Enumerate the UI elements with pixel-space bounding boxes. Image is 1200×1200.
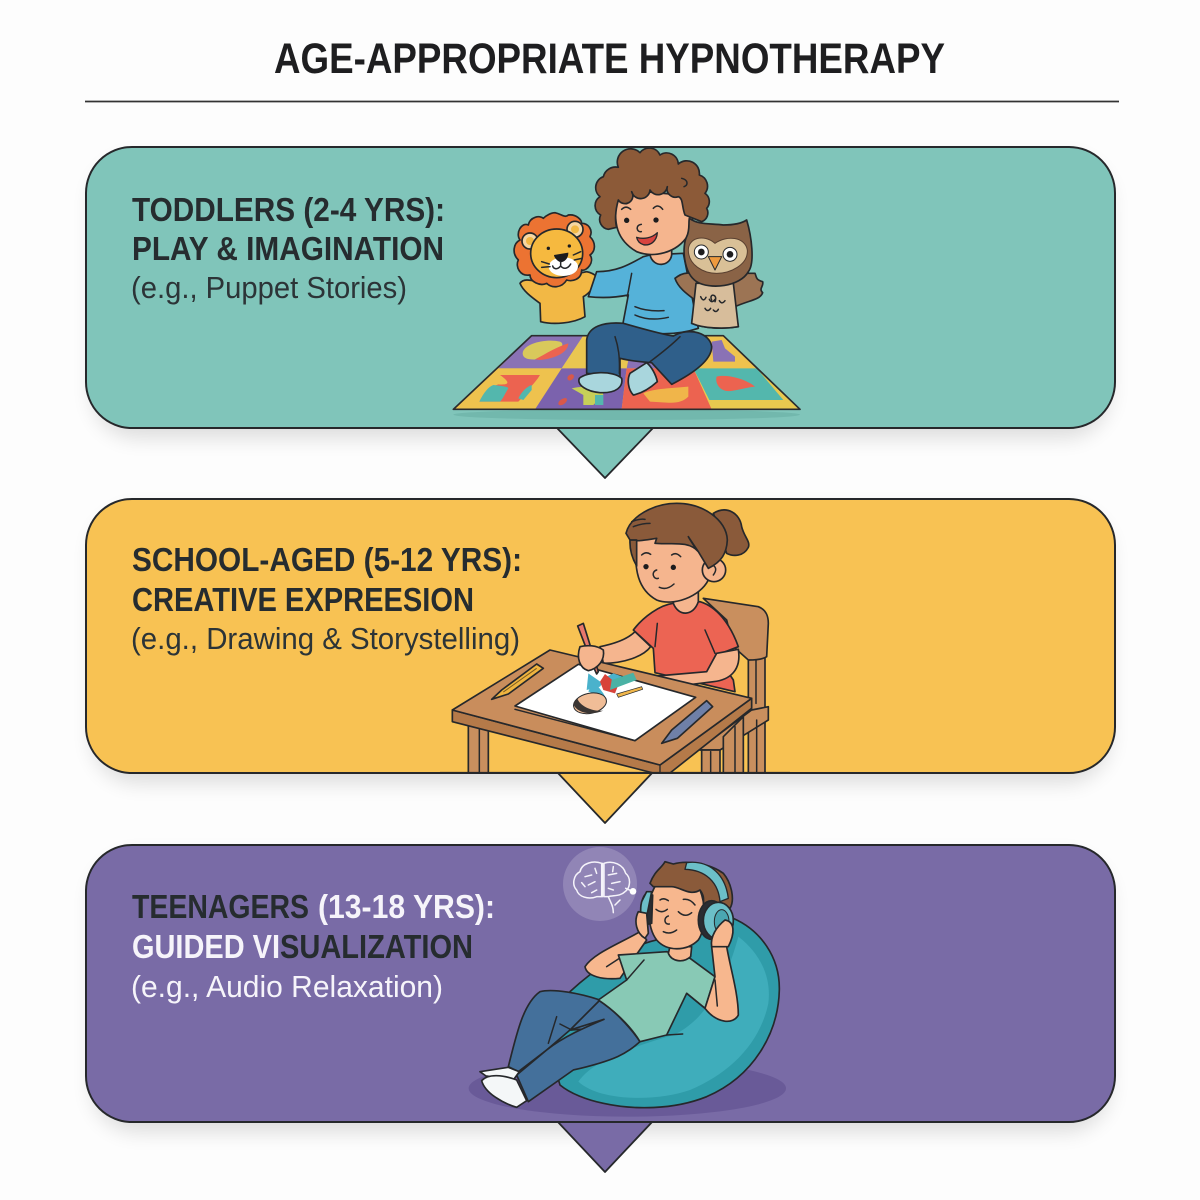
lion puppet: [514, 213, 598, 323]
heading: play and imagination: PLAY & IMAGINATION: [132, 231, 444, 268]
icon: brain in thought bubble: [563, 847, 637, 921]
girl: [600, 503, 749, 697]
text: puppet stories example: (e.g., Puppet Stories): [131, 270, 407, 305]
illustration: child with puppets on play mat: [453, 148, 800, 420]
title: AGE-APPROPRIATE HYPNOTHERAPY: [274, 35, 945, 83]
chair: [700, 598, 768, 773]
heading: creative expression: CREATIVE EXPREESION: [132, 582, 474, 619]
pencil: red in hand: [578, 623, 598, 674]
panel: teenagers: [86, 845, 1115, 1122]
heading: guided visualization: SUALIZATION: [280, 929, 473, 966]
text: drawing and storytelling example: (e.g., Drawing & Storystelling): [131, 621, 520, 656]
arrow: toddlers to school-aged: [557, 428, 653, 478]
heading: guided visualization: [132, 929, 473, 966]
heading: toddlers age range: TODDLERS (2-4 YRS):: [132, 192, 445, 229]
owl puppet: [675, 218, 763, 328]
pencil: blue on desk: [662, 701, 713, 743]
panel: school-aged: [86, 499, 1115, 773]
arrow: school-aged to teenagers: [557, 772, 653, 823]
bean bag: [548, 918, 779, 1108]
text: audio relaxation example: (e.g., Audio Relaxation): [131, 969, 443, 1004]
paper with drawing: [515, 664, 696, 741]
hand holding pencil: [578, 646, 604, 671]
panel: toddlers: [86, 147, 1115, 428]
teen: [480, 862, 738, 1107]
heading: teenagers age range: (13-18 YRS):: [318, 889, 495, 926]
arrow: teenagers downward: [557, 1121, 653, 1172]
heading: school-aged age range: SCHOOL-AGED (5-12 YRS):: [132, 542, 522, 579]
heading: teenagers age range: TEENAGERS: [132, 889, 309, 926]
play mat: [453, 336, 800, 409]
illustration: child drawing at desk: [440, 503, 790, 773]
heading: teenagers age range: [132, 889, 495, 926]
boy: [579, 148, 712, 395]
illustration: teen relaxing with headphones on bean bag: [469, 847, 786, 1117]
heading: guided visualization: GUIDED VI: [132, 929, 280, 966]
pencil: yellow on desk: [492, 664, 543, 699]
desk: [452, 650, 752, 773]
